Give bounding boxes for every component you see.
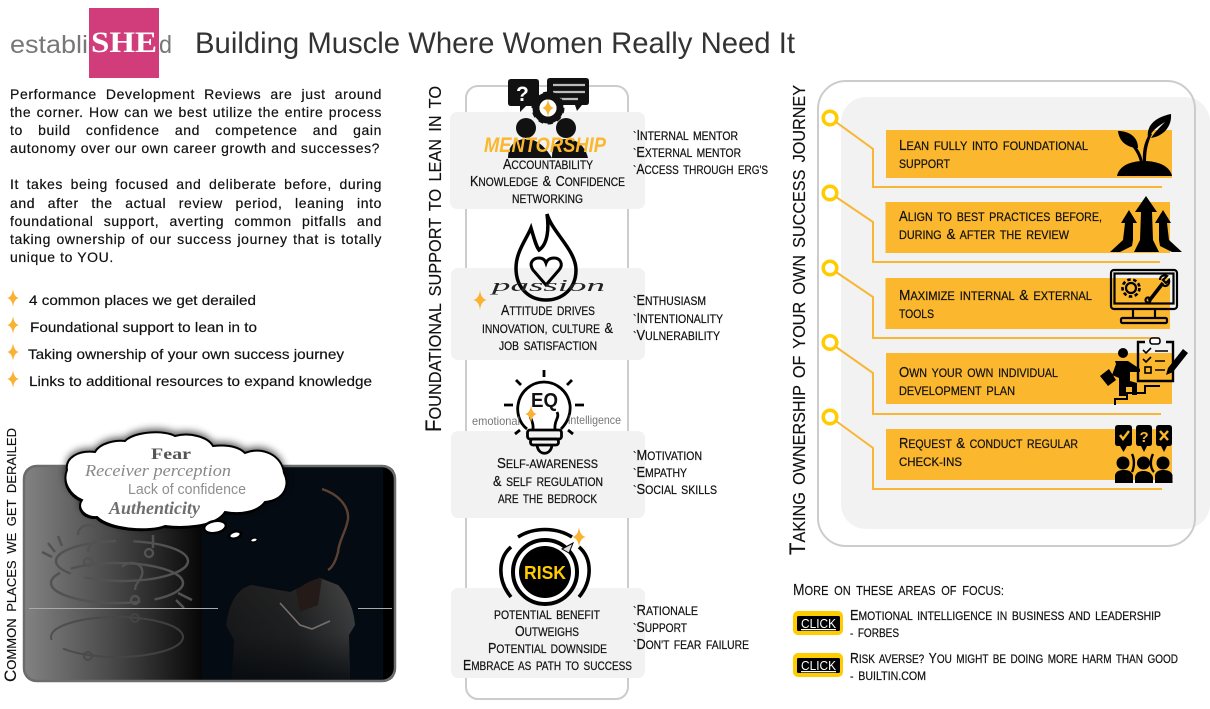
panel: mentorship: ACCOUNTABILITY <box>503 157 593 173</box>
vertical heading: foundational support: FOUNDATIONAL SUPPORT TO LEAN IN TO <box>421 86 446 432</box>
thought bubble: fears <box>64 429 286 543</box>
panel: passion: JOB SATISFACTION <box>499 339 597 353</box>
icon: three rising arrows <box>1110 196 1182 252</box>
vertical heading: common places: COMMON PLACES WE GET DERAILED <box>1 428 20 682</box>
bullet list <box>7 289 372 389</box>
panel: passion: ATTITUDE DRIVES <box>501 303 595 319</box>
link: risk averse article <box>793 651 1178 683</box>
icon: EQ light bulb <box>504 370 584 453</box>
thought bubble: fears: Receiver perception <box>84 461 231 480</box>
icon: sparkle <box>473 290 487 310</box>
panel: risk <box>451 527 645 678</box>
logo: establiSHEd: establi <box>10 31 88 59</box>
intro paragraph 2 <box>10 176 382 266</box>
list: mentorship: `EXTERNAL MENTOR <box>633 145 741 161</box>
intro paragraph 1: autonomy over our own career growth and successes? <box>10 140 380 156</box>
panel: emotional intelligence: & SELF REGULATION <box>493 474 603 490</box>
button: click: CLICK <box>801 616 836 631</box>
panel: emotional intelligence <box>451 370 645 518</box>
step 4: individual development plan <box>823 336 1188 414</box>
panel: emotional intelligence: ARE THE BEDROCK <box>498 492 597 506</box>
icon: monitor with gear and wrench <box>1111 270 1177 323</box>
list: mentorship <box>633 128 768 178</box>
panel: foundational support outline <box>466 86 628 699</box>
panel: emotional intelligence: SELF-AWARENESS <box>497 456 598 472</box>
intro paragraph 1: the corner. How can we best utilize the entire process <box>10 104 382 120</box>
step 3: maximize tools: MAXIMIZE INTERNAL & EXTERNAL <box>899 288 1092 304</box>
list: emotional intelligence: `MOTIVATION <box>633 448 702 464</box>
thought bubble: fears: Authenticity <box>108 498 201 518</box>
step 1: lean into foundational support <box>823 111 1172 187</box>
intro paragraph 1: to build confidence and competence and gain <box>10 122 382 138</box>
panel: risk: OUTWEIGHS <box>515 624 579 640</box>
intro paragraph 2: It takes being focused and deliberate before, during <box>10 176 382 192</box>
step 4: individual development plan: DEVELOPMENT PLAN <box>899 384 1015 398</box>
icon: risk dial: RISK <box>524 563 566 583</box>
intro paragraph 2: taking ownership of our success journey that is totally <box>10 231 382 247</box>
panel: taking ownership backdrop <box>818 81 1210 546</box>
list: emotional intelligence: `SOCIAL SKILLS <box>633 482 717 498</box>
step 3: maximize tools: TOOLS <box>899 307 934 321</box>
vertical heading: taking ownership: TAKING OWNERSHIP OF YOUR OWN SUCCESS JOURNEY <box>785 85 810 555</box>
icon: faded question rings <box>42 525 192 608</box>
panel: passion <box>451 214 645 360</box>
link: emotional intelligence article: - FORBES <box>850 626 899 640</box>
step 2: align to best practices: ALIGN TO BEST PRACTICES BEFORE, <box>899 209 1102 225</box>
intro paragraph 2: unique to YOU. <box>10 249 114 265</box>
list: emotional intelligence: `EMPATHY <box>633 465 687 481</box>
list: emotional intelligence <box>633 448 717 498</box>
thought bubble: fears: Lack of confidence <box>128 482 246 498</box>
bullet list: Links to additional resources to expand knowledge <box>29 373 372 389</box>
list: passion <box>633 293 723 344</box>
link: emotional intelligence article: EMOTIONAL INTELLIGENCE IN BUSINESS AND LEADERSHIP <box>850 608 1161 624</box>
list: passion: `ENTHUSIASM <box>633 293 706 309</box>
icon: audience with speech bubbles: ? <box>1140 429 1149 446</box>
intro paragraph 1: Performance Development Reviews are just around <box>10 86 382 102</box>
intro paragraph 1 <box>10 86 382 156</box>
list: risk: `RATIONALE <box>633 603 698 619</box>
panel: passion: INNOVATION, CULTURE & <box>482 321 613 337</box>
step 5: regular check-ins <box>823 410 1172 489</box>
woman silhouette <box>226 489 355 680</box>
link: risk averse article: - BUILTIN.COM <box>850 669 926 683</box>
logo: establiSHEd <box>10 8 172 78</box>
logo: establiSHEd: SHE <box>91 26 157 59</box>
step 4: individual development plan: OWN YOUR OWN INDIVIDUAL <box>899 365 1058 381</box>
button: click: CLICK <box>801 658 836 673</box>
list: passion: `INTENTIONALITY <box>633 311 723 327</box>
icon: audience with speech bubbles <box>1115 425 1172 483</box>
passion script word: passion <box>490 276 605 295</box>
icon: mentorship people and speech bubbles <box>484 78 607 158</box>
intro paragraph 2: foundational support, averting common pitfalls and <box>10 213 382 229</box>
step 1: lean into foundational support: SUPPORT <box>899 157 950 171</box>
icon: mentorship people and speech bubbles: ? <box>516 83 529 106</box>
panel: mentorship: KNOWLEDGE & CONFIDENCE <box>470 174 625 190</box>
bullet list: 4 common places we get derailed <box>29 292 256 308</box>
icon: person climbing to clipboard <box>1100 338 1188 405</box>
icon: flame with heart <box>516 214 576 300</box>
list: risk <box>633 603 749 653</box>
link: emotional intelligence article <box>793 608 1161 640</box>
heading: more on these areas: MORE ON THESE AREAS OF FOCUS: <box>793 582 1004 599</box>
thought bubble: fears: Fear <box>151 446 191 463</box>
button: click <box>793 653 843 677</box>
bullet list: Taking ownership of your own success journey <box>28 346 344 362</box>
step 2: align to best practices <box>823 186 1182 262</box>
button: click <box>793 611 843 635</box>
panel: emotional intelligence: EQ <box>531 390 558 412</box>
step 5: regular check-ins: REQUEST & CONDUCT REGULAR <box>899 436 1078 452</box>
list: mentorship: `ACCESS THROUGH ERG'S <box>633 162 768 178</box>
panel: risk: EMBRACE AS PATH TO SUCCESS <box>463 658 632 674</box>
icon: sprout <box>1117 114 1172 176</box>
logo: establiSHEd: d <box>159 31 172 59</box>
step 2: align to best practices: DURING & AFTER THE REVIEW <box>899 227 1070 243</box>
photo panel: derailed woman <box>23 465 396 682</box>
step 3: maximize tools <box>823 261 1177 338</box>
title: Building Muscle Where Women Really Need It <box>195 27 796 60</box>
panel: mentorship: NETWORKING <box>512 192 583 206</box>
panel: risk: POTENTIAL DOWNSIDE <box>488 641 607 657</box>
list: passion: `VULNERABILITY <box>633 328 720 344</box>
panel: risk: POTENTIAL BENEFIT <box>494 608 600 622</box>
icon: mentorship people and speech bubbles: MENTORSHIP <box>484 134 607 157</box>
panel: mentorship <box>450 78 645 209</box>
step 1: lean into foundational support: LEAN FULLY INTO FOUNDATIONAL <box>899 138 1088 154</box>
list: risk: `SUPPORT <box>633 620 687 636</box>
panel: emotional intelligence: emotional <box>472 414 520 428</box>
step 5: regular check-ins: CHECK-INS <box>899 455 962 469</box>
bullet list: Foundational support to lean in to <box>30 319 257 335</box>
list: risk: `DON'T FEAR FAILURE <box>633 637 749 653</box>
icon: risk dial <box>501 527 589 604</box>
panel: emotional intelligence: intelligence <box>568 413 621 427</box>
intro paragraph 2: and after the actual review period, leaning into <box>10 194 382 210</box>
list: mentorship: `INTERNAL MENTOR <box>633 128 738 144</box>
